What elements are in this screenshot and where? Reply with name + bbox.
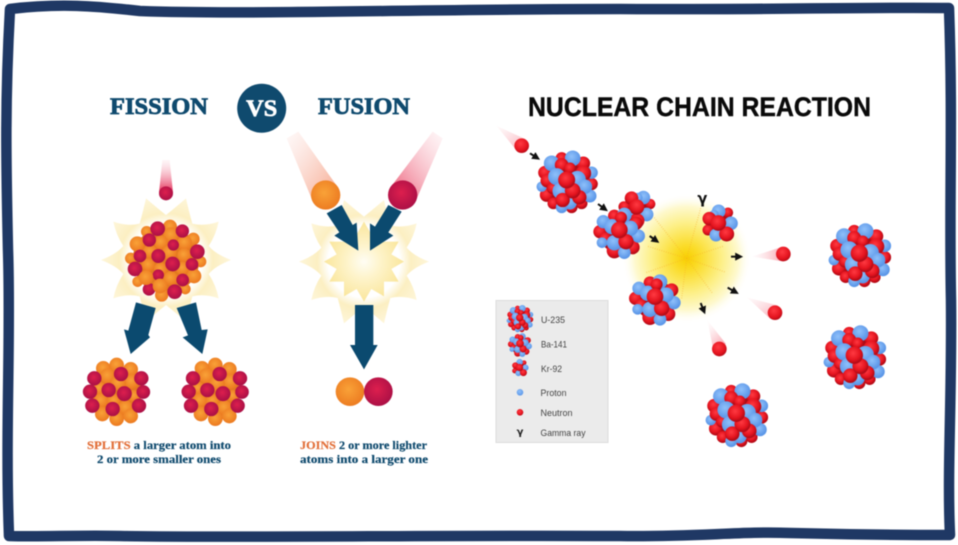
legend icon: proton [517,389,523,396]
panel: fission diagram [101,160,231,322]
burst star: fusion outer [299,200,429,323]
title: fission: FISSION [110,94,208,119]
text: splits caption: SPLITS a larger atom into [87,440,231,452]
atom: U-235 target [538,152,597,212]
explosion rays [646,208,726,298]
atom: Kr-92 [703,205,737,241]
neutron: right [752,247,791,261]
large atom: fission [126,220,206,301]
incoming red nucleus [388,132,443,210]
arrow: left into fusion [327,205,358,251]
incoming orange nucleus [287,132,340,210]
small atom: left [83,358,150,425]
neutron: incoming [497,126,529,153]
legend icon: gamma ray: γ [517,427,524,438]
legend label: Ba-141: Ba-141 [541,340,567,350]
badge: VS [237,84,286,133]
atom: Ba-141 upper [594,209,644,258]
text: joins caption [300,440,428,466]
atom: bottom U-235 [707,384,767,446]
atom: upper right U-235 [830,224,890,286]
neutron: bottom [707,320,727,356]
text: joins caption: atoms into a larger one [300,454,428,466]
arrow: fusion down [350,305,378,369]
legend label: proton: Proton [540,388,566,399]
badge: VS: VS [246,96,277,121]
panel: chain reaction diagram [497,126,791,356]
text: joins caption: JOINS 2 or more lighter [300,440,427,452]
fused nucleus [336,377,393,406]
panel: legend [496,300,608,442]
incoming neutron [159,160,173,200]
burst star: fission [101,198,231,322]
arrow: fission left [124,302,156,354]
arrows: reaction direction [530,153,740,311]
burst star: fusion inner [324,222,404,302]
legend label: neutron: Neutron [540,408,572,419]
explosion glow [622,193,752,323]
legend icon: U-235 [507,305,533,332]
arrow: fission right [177,302,208,354]
title: nuclear chain reaction: NUCLEAR CHAIN REACTION [528,92,871,122]
neutron: lower right [747,298,782,320]
text: splits caption [87,440,231,466]
atom: Kr-92 behind [614,184,662,232]
gamma label: γ [697,190,707,207]
legend icon: neutron [517,409,523,416]
legend icon: Kr-92 [513,359,528,376]
legend icon: Ba-141 [508,334,531,356]
panel: fusion diagram [287,132,443,323]
atom: Ba-141 lower [630,275,680,325]
atom: middle right U-235 [825,326,885,388]
arrow: right into fusion [370,205,402,251]
small atom: right [182,358,248,425]
legend label: gamma ray: Gamma ray [540,428,586,439]
text: splits caption: 2 or more smaller ones [97,454,222,466]
panel: fission and fusion products [83,302,393,425]
legend label: U-235: U-235 [541,315,565,326]
title: fusion: FUSION [318,94,410,119]
legend label: Kr-92: Kr-92 [541,364,562,375]
